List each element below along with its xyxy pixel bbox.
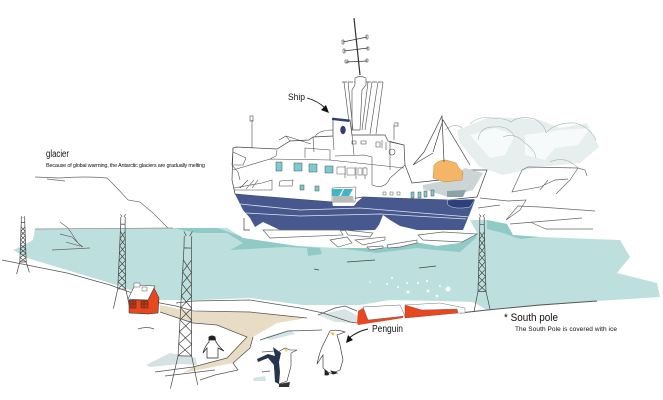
red house [128, 283, 159, 314]
ship rear mast [250, 116, 398, 148]
lifeboat davit [413, 116, 470, 165]
label: penguin: Penguin [372, 324, 403, 335]
ship superstructure [232, 118, 487, 202]
ship [232, 18, 487, 231]
tower 3 [170, 231, 202, 389]
ship windows [276, 162, 434, 198]
ship hull [235, 194, 475, 231]
ship funnel cap [332, 118, 350, 122]
penguin left [203, 336, 224, 358]
tower 4 [474, 214, 490, 312]
snow patches [146, 353, 197, 367]
penguin middle [257, 347, 297, 387]
label: glacier description: Because of global warming, the Antarctic glaciers are gradually melting [46, 163, 205, 169]
porthole [340, 126, 346, 134]
shore and ground [2, 260, 597, 381]
ship lifeboat [433, 160, 463, 182]
ground lines [2, 260, 597, 380]
red buildings [357, 303, 465, 325]
ship detail lines [232, 130, 405, 190]
glacier outlines [35, 167, 595, 250]
tower 2 [113, 214, 131, 309]
clouds [445, 117, 599, 175]
sand path [160, 305, 307, 373]
ship funnel rigging [342, 76, 383, 134]
label: south pole description: The South Pole is covered with ice [515, 326, 617, 333]
label: ship: Ship [288, 92, 305, 102]
ship mast and antenna [342, 18, 369, 75]
ice floes [263, 215, 477, 250]
towers [17, 214, 490, 389]
sea water [13, 220, 660, 310]
label: glacier heading: glacier [46, 149, 70, 160]
tower 1 [17, 216, 29, 274]
penguin right with label [317, 329, 368, 375]
ship grey aft deck [423, 168, 483, 197]
ship bridge glass [332, 187, 356, 202]
ship label arrow [307, 98, 329, 113]
penguin arrow [349, 329, 368, 338]
label: south pole heading: * South pole [504, 312, 558, 324]
